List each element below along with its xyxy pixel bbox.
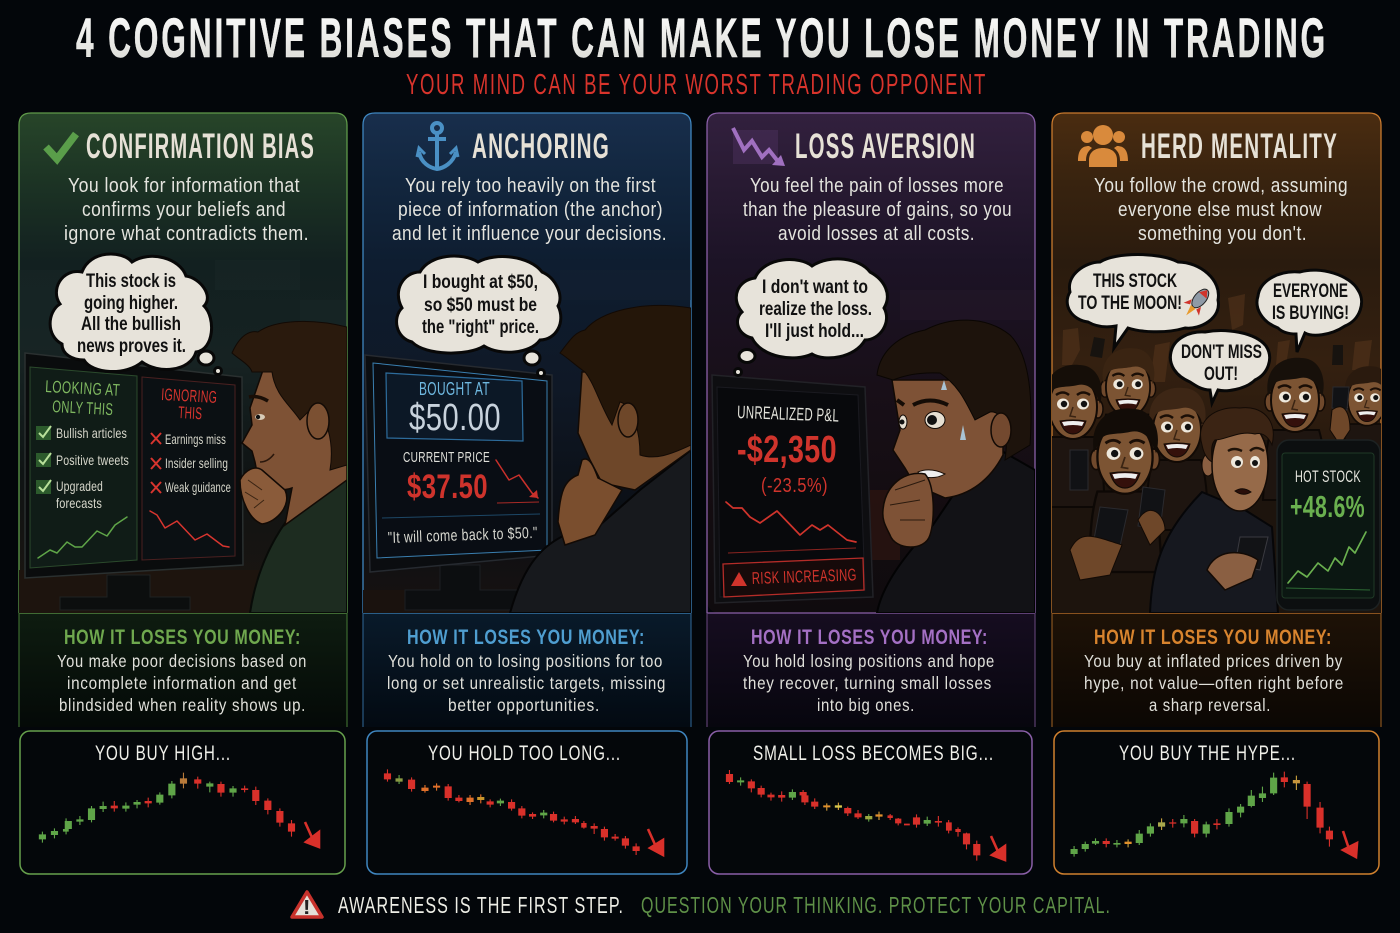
- description text: avoid losses at all costs.: [778, 223, 975, 245]
- how it loses you money: HOW IT LOSES YOU MONEY:: [407, 626, 645, 649]
- how it loses you money: [743, 626, 995, 715]
- description text: confirms your beliefs and: [82, 199, 286, 221]
- background bodies: [1052, 440, 1381, 613]
- monitor stand: [60, 575, 190, 610]
- thought bubble: This stock is: [86, 271, 176, 292]
- panel: anchoring: [363, 113, 691, 727]
- how it loses you money: incomplete information and get: [67, 673, 297, 693]
- footer text: AWARENESS IS THE FIRST STEP.: [338, 892, 624, 918]
- candlestick chart: [384, 769, 640, 855]
- description text: [743, 175, 1012, 245]
- speech bubble: to the moon: TO THE MOON!: [1078, 293, 1182, 314]
- description text: and let it influence your decisions.: [392, 223, 667, 245]
- chart panel: you hold too long: YOU HOLD TOO LONG...: [428, 742, 621, 765]
- thought bubble: I don't want to: [762, 277, 868, 298]
- chart panel: you buy the hype: [1054, 731, 1379, 874]
- raised arms: [1062, 294, 1372, 382]
- icon: warning triangle: [292, 892, 322, 919]
- how it loses you money: a sharp reversal.: [1149, 695, 1271, 715]
- speech bubble: everyone is buying: EVERYONE: [1273, 281, 1348, 302]
- monitor pane: ignoring this: [142, 377, 235, 560]
- description text: ignore what contradicts them.: [64, 223, 309, 245]
- heading: anchoring: ANCHORING: [472, 127, 610, 166]
- thought bubble: going higher.: [84, 293, 178, 314]
- thought bubble: the "right" price.: [422, 317, 539, 338]
- speech bubble: don't miss out: [1170, 331, 1270, 403]
- description text: than the pleasure of gains, so you: [743, 199, 1012, 221]
- current price: $37.50: [407, 468, 488, 506]
- description text: [1094, 175, 1348, 245]
- how it loses you money: long or set unrealistic targets, missing: [387, 673, 666, 693]
- arrow down: [1343, 831, 1357, 857]
- how it loses you money: into big ones.: [817, 695, 915, 715]
- speech bubble: everyone is buying: [1257, 270, 1362, 352]
- chart panel: you hold too long: [367, 731, 687, 874]
- monitor pane: looking at only this: [30, 367, 137, 568]
- speech bubble: to the moon: [1067, 254, 1218, 348]
- worried man: [1150, 408, 1278, 613]
- arrow down: [648, 829, 663, 855]
- monitor pane: looking at only this: forecasts: [56, 495, 102, 511]
- description text: [64, 175, 309, 245]
- panel: confirmation bias: [19, 113, 347, 727]
- speech bubble: everyone is buying: IS BUYING!: [1272, 303, 1349, 324]
- monitor: [712, 375, 873, 603]
- current price: [403, 449, 539, 506]
- person from behind: [510, 305, 691, 613]
- thought bubble: I bought at $50,: [423, 272, 538, 293]
- how it loses you money: HOW IT LOSES YOU MONEY:: [751, 626, 988, 649]
- unrealized p&l: [726, 402, 856, 553]
- icon: falling chart: [733, 128, 785, 166]
- monitor pane: ignoring this: Insider selling: [165, 455, 228, 471]
- risk increasing: [723, 558, 864, 597]
- illustration: trader and monitor: [19, 260, 347, 613]
- bought at box: BOUGHT AT: [419, 379, 490, 399]
- how it loses you money: better opportunities.: [448, 695, 600, 715]
- monitor pane: looking at only this: ONLY THIS: [52, 397, 114, 419]
- icon: check mark: [46, 134, 76, 159]
- arrow down: [305, 822, 319, 847]
- monitor pane: looking at only this: Upgraded: [56, 478, 103, 494]
- icon: warning triangle: !: [303, 897, 311, 919]
- how it loses you money: blindsided when reality shows up.: [59, 695, 306, 715]
- panel: herd mentality: [1041, 113, 1393, 727]
- icon: anchor: [417, 123, 458, 170]
- how it loses you money: [57, 626, 307, 715]
- arrow down: [991, 836, 1005, 860]
- thought bubble: [397, 256, 561, 376]
- candlestick chart: [726, 770, 980, 861]
- candlestick chart: [39, 773, 295, 843]
- speech bubble: don't miss out: DON'T MISS: [1181, 342, 1262, 363]
- bought at box: [386, 373, 523, 441]
- monitor pane: looking at only this: Bullish articles: [56, 425, 127, 441]
- subtitle: YOUR MIND CAN BE YOUR WORST TRADING OPPONENT: [406, 69, 987, 101]
- speech bubble: to the moon: THIS STOCK: [1093, 271, 1177, 292]
- thought bubble: I'll just hold...: [765, 321, 864, 342]
- unrealized p&l: (-23.5%): [761, 475, 828, 497]
- monitor: [365, 355, 552, 572]
- monitor pane: looking at only this: Positive tweets: [56, 452, 129, 468]
- illustration: trader from behind: [363, 270, 691, 613]
- phones held in crowd: [1070, 387, 1349, 555]
- thought bubble: [734, 259, 887, 376]
- bought at box: $50.00: [409, 397, 501, 439]
- phone: hot stock: [1277, 440, 1380, 610]
- icon: group of people: [1078, 125, 1128, 167]
- chart panel: you buy high: [20, 731, 345, 874]
- description text: You feel the pain of losses more: [750, 175, 1004, 197]
- thought bubble: [50, 254, 222, 374]
- phone: hot stock: HOT STOCK: [1295, 467, 1361, 486]
- faces in crowd: [1344, 366, 1381, 440]
- how it loses you money: You make poor decisions based on: [57, 651, 307, 671]
- panel: loss aversion: [707, 113, 1035, 727]
- footer message: [292, 892, 1111, 919]
- how it loses you money: You hold on to losing positions for too: [388, 651, 663, 671]
- unrealized p&l: UNREALIZED P&L: [737, 402, 839, 426]
- thought bubble: news proves it.: [77, 336, 186, 357]
- thought bubble: so $50 must be: [424, 295, 537, 316]
- person in profile: [232, 321, 347, 613]
- icon: rocket: [1178, 284, 1215, 322]
- description text: You look for information that: [68, 175, 300, 197]
- footer call to action: QUESTION YOUR THINKING. PROTECT YOUR CAPITAL.: [641, 892, 1111, 918]
- risk increasing: RISK INCREASING: [751, 565, 857, 588]
- description text: You follow the crowd, assuming: [1094, 175, 1348, 197]
- person, front three-quarter: [877, 320, 1035, 613]
- how it loses you money: hype, not value—often right before: [1084, 673, 1344, 693]
- thought bubble: realize the loss.: [759, 299, 872, 320]
- description text: [392, 175, 667, 245]
- phone: hot stock: +48.6%: [1290, 489, 1365, 524]
- monitor pane: ignoring this: Weak guidance: [165, 479, 231, 495]
- description text: something you don't.: [1138, 223, 1307, 245]
- description text: You rely too heavily on the first: [405, 175, 656, 197]
- monitor pane: ignoring this: THIS: [178, 403, 203, 423]
- how it loses you money: HOW IT LOSES YOU MONEY:: [1094, 626, 1332, 649]
- description text: piece of information (the anchor): [398, 199, 663, 221]
- chart panel: small loss becomes big: [709, 731, 1032, 874]
- current price: CURRENT PRICE: [403, 449, 490, 466]
- monitor: [25, 353, 243, 578]
- how it loses you money: [1084, 626, 1344, 715]
- chart panel: you buy the hype: YOU BUY THE HYPE...: [1119, 742, 1296, 765]
- how it loses you money: HOW IT LOSES YOU MONEY:: [64, 626, 301, 649]
- chart panel: you buy high: YOU BUY HIGH...: [95, 742, 231, 765]
- monitor stand: [405, 565, 522, 610]
- how it loses you money: You hold losing positions and hope: [743, 651, 995, 671]
- thought bubble: All the bullish: [81, 314, 181, 335]
- monitor pane: looking at only this: LOOKING AT: [45, 377, 121, 400]
- unrealized p&l: -$2,350: [737, 429, 837, 471]
- monitor pane: ignoring this: Earnings miss: [165, 431, 226, 447]
- heading: loss aversion: LOSS AVERSION: [795, 127, 976, 166]
- candlestick chart: [1071, 772, 1333, 857]
- description text: everyone else must know: [1118, 199, 1322, 221]
- monitor quote: "It will come back to $50.": [388, 525, 538, 547]
- how it loses you money: You buy at inflated prices driven by: [1084, 651, 1343, 671]
- chart panel: small loss becomes big: SMALL LOSS BECOMES BIG...: [753, 742, 994, 765]
- illustration: crowd: [1041, 294, 1393, 613]
- how it loses you money: they recover, turning small losses: [743, 673, 992, 693]
- how it loses you money: [387, 626, 666, 715]
- illustration: worried trader: [712, 290, 1035, 613]
- speech bubble: don't miss out: OUT!: [1204, 364, 1238, 385]
- heading: confirmation bias: CONFIRMATION BIAS: [86, 127, 315, 166]
- monitor pane: ignoring this: IGNORING: [161, 385, 218, 407]
